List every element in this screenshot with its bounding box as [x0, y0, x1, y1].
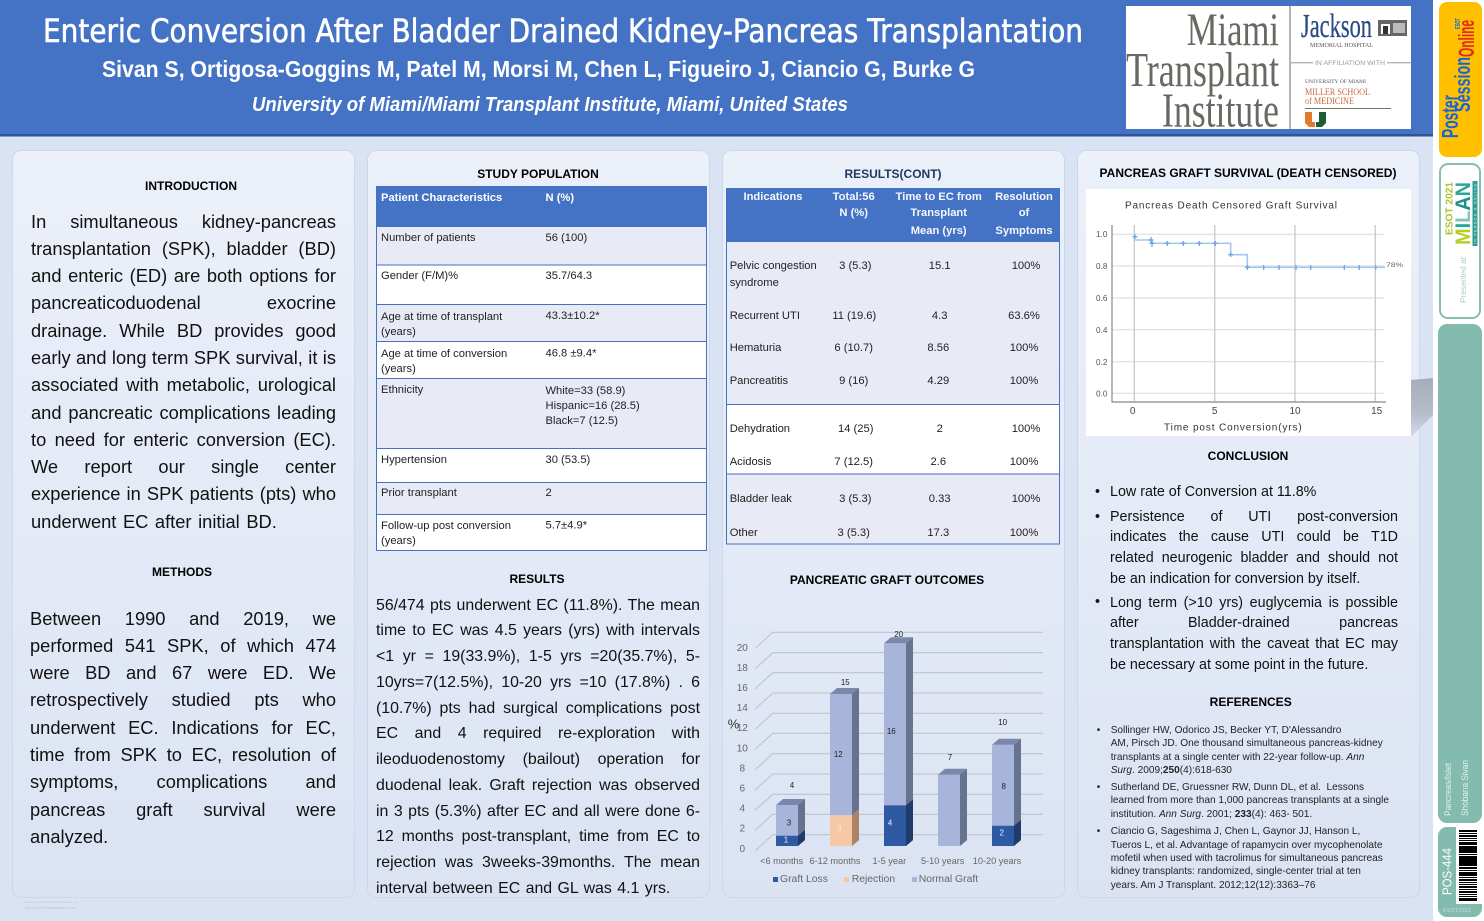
sidebar: ESOT 2021 Milan badge: ESOT 2021	[1444, 182, 1456, 235]
table: patient characteristics: Prior transplant	[381, 487, 458, 499]
chart: Kaplan-Meier graft survival curve: 1.0	[1096, 230, 1108, 239]
sidebar: topic and presenter strip: Pancreas/Islet	[1443, 763, 1454, 816]
sidebar: Poster Session Online badge: Session	[1450, 57, 1475, 112]
table: indications for conversion: Mean (yrs)	[911, 225, 967, 237]
table: patient characteristics: Follow-up post conversion	[381, 520, 511, 532]
logo: Miami Transplant Institute and affiliates: Jackson	[1301, 8, 1372, 45]
table: indications for conversion: 100%	[1010, 375, 1038, 387]
legend: Graft Loss	[780, 874, 828, 885]
table: indications for conversion: Total:56	[833, 191, 875, 203]
sidebar: Poster Session Online badge	[1439, 2, 1482, 157]
text block: conclusion bullets: transplantation with the caveat that EC may	[1110, 636, 1398, 652]
heading: results: RESULTS	[509, 572, 565, 586]
table: indications for conversion: Symptoms	[995, 225, 1053, 237]
y axis labels: 20	[737, 643, 748, 654]
logo: Miami Transplant Institute and affiliates: MILLER SCHOOL	[1305, 88, 1370, 98]
bar: 6-12 months	[826, 688, 860, 846]
table: indications for conversion: 0.33	[929, 493, 951, 505]
text block: results: duodenal leak. Graft rejection was observed	[376, 777, 700, 794]
logo: Miami Transplant Institute and affiliates: MEMORIAL HOSPITAL	[1310, 42, 1373, 49]
bar: 1-5 year	[880, 637, 914, 846]
text block: conclusion bullets: be an indication for conversion by itself.	[1110, 571, 1360, 587]
logo: Miami Transplant Institute and affiliates	[1126, 6, 1411, 129]
table: indications for conversion: 4.3	[932, 310, 947, 322]
bar value labels: 15	[841, 678, 850, 687]
table: patient characteristics: Age at time of conversion	[381, 348, 507, 360]
text block: results: 10yrs=7(12.5%), 10-20 yrs =10 (17.8%) . 6	[376, 674, 700, 691]
y axis labels: 10	[737, 743, 748, 754]
text block: conclusion bullets	[1095, 484, 1398, 673]
text block: methods: analyzed.	[30, 826, 108, 847]
text block: methods: were BD and 67 were ED. We	[30, 662, 336, 683]
chart: Kaplan-Meier graft survival curve: 5	[1212, 406, 1218, 417]
table: indications for conversion: 11 (19.6)	[832, 310, 877, 322]
text block: conclusion bullets: Low rate of Conversion at 11.8%	[1110, 484, 1316, 500]
table: indications for conversion: Indications	[743, 191, 803, 203]
chart: Kaplan-Meier graft survival curve	[1086, 189, 1411, 436]
bar value labels: 1	[784, 836, 789, 845]
y axis labels: 0	[740, 844, 746, 855]
y axis labels: 8	[740, 763, 746, 774]
panel: survival, conclusion and references: •	[1097, 725, 1100, 736]
table: indications for conversion: syndrome	[730, 277, 779, 289]
sidebar: topic and presenter strip: Shobana Sivan	[1460, 760, 1471, 816]
y axis labels: %	[728, 716, 740, 732]
text block: conclusion bullets: indicates the cause UTI could be T1D	[1110, 529, 1398, 545]
text block: introduction: experience in SPK patients (pts) who	[31, 483, 336, 504]
bar: 5-10 years	[934, 769, 968, 846]
bar value labels: 16	[887, 727, 896, 736]
table: indications for conversion: Time to EC from	[896, 191, 982, 203]
text block: results	[376, 597, 700, 897]
table: indications for conversion: 9 (16)	[839, 375, 869, 387]
chart: Kaplan-Meier graft survival curve: 0	[1130, 406, 1136, 417]
table: patient characteristics: 30 (53.5)	[546, 454, 591, 466]
text block: introduction: early and long term SPK survival, it is	[31, 347, 336, 368]
sidebar: poster number and barcode: POS-444	[1440, 848, 1454, 895]
text block: introduction: and pancreatic complications leading	[31, 402, 336, 423]
heading: references: REFERENCES	[1210, 695, 1292, 709]
y axis labels: 2	[740, 824, 746, 835]
chart: stacked 3D bar chart of graft outcomes	[728, 630, 1043, 885]
y axis labels: 4	[740, 804, 746, 815]
table: indications for conversion: Transplant	[910, 207, 967, 219]
table: indications for conversion: Recurrent UTI	[730, 310, 800, 322]
text block: methods: symptoms, complications and	[30, 771, 336, 792]
text block: conclusion bullets: after Bladder-drained pancreas	[1110, 615, 1398, 631]
panel: introduction and methods	[12, 150, 355, 898]
table: patient characteristics: 46.8 ±9.4*	[546, 348, 597, 360]
table: indications for conversion: 14 (25)	[838, 423, 874, 435]
table: patient characteristics: Gender (F/M)%	[381, 270, 458, 282]
panel: study population and results	[367, 150, 710, 898]
table: patient characteristics: 43.3±10.2*	[546, 310, 600, 322]
bar value labels: 4	[790, 781, 795, 790]
panel: survival, conclusion and references: •	[1095, 484, 1100, 500]
legend: Rejection	[852, 874, 895, 885]
bar value labels: 2	[999, 828, 1004, 837]
sidebar: Poster Session Online badge: ESOT	[1455, 18, 1462, 29]
table: patient characteristics: Black=7 (12.5)	[546, 415, 618, 427]
table: indications for conversion: 2.6	[931, 456, 946, 468]
table: indications for conversion: Hematuria	[730, 342, 782, 354]
text block: references: Sollinger HW, Odorico JS, Becker YT, D'Alessandro	[1111, 725, 1341, 736]
text block: references: Surg. 2009;250(4):618-630	[1111, 765, 1232, 776]
sidebar: poster number and barcode: ESOT2021	[1443, 908, 1471, 914]
table: indications for conversion: 63.6%	[1008, 310, 1040, 322]
table: patient characteristics: N (%)	[546, 192, 574, 204]
text block: references: mofetil when used with tacrolimus for simultaneous pancreas	[1111, 853, 1383, 864]
table: indications for conversion: 7 (12.5)	[834, 456, 873, 468]
sidebar: poster number and barcode	[1438, 827, 1482, 917]
bar value labels	[784, 630, 1008, 845]
chart: Kaplan-Meier graft survival curve: 0.6	[1096, 294, 1108, 303]
text block: conclusion bullets: Persistence of UTI post-conversion	[1110, 509, 1398, 525]
table: indications for conversion: Pelvic congestion	[730, 260, 817, 272]
barcode	[1459, 830, 1477, 901]
table: indications for conversion: of	[1019, 207, 1030, 219]
chart: Kaplan-Meier graft survival curve: 0.4	[1096, 326, 1108, 335]
table: indications for conversion: Acidosis	[730, 456, 772, 468]
text block: references: Sutherland DE, Gruessner RW, Dunn DL, et al. Lessons	[1111, 782, 1364, 793]
text block: methods: pancreas graft survival were	[30, 799, 336, 820]
header banner	[0, 0, 1433, 136]
table: indications for conversion: 3 (5.3)	[839, 493, 872, 505]
x axis labels: 10-20 years	[973, 856, 1022, 866]
footer credit	[25, 902, 78, 910]
sidebar: ESOT 2021 Milan badge	[1439, 163, 1481, 319]
table: indications for conversion: 100%	[1012, 423, 1040, 435]
text block: methods	[30, 608, 336, 847]
bar value labels: 3	[787, 818, 792, 827]
text block: introduction: and enteric (ED) are both options for	[31, 265, 336, 286]
table: indications for conversion: Bladder leak	[730, 493, 792, 505]
x axis labels: 1-5 year	[872, 856, 906, 866]
text block: introduction: to need for enteric conversion (EC).	[31, 429, 336, 450]
text block: conclusion bullets: Long term (>10 yrs) euglycemia is possible	[1110, 595, 1398, 611]
text block: introduction: In simultaneous kidney-pancreas	[31, 210, 336, 232]
panel: survival, conclusion and references: •	[1097, 782, 1100, 793]
text block: methods: time from SPK to EC, resolution of	[30, 744, 336, 765]
sidebar: topic and presenter strip	[1438, 324, 1482, 823]
table: indications for conversion: N (%)	[839, 207, 868, 219]
x axis labels: 6-12 months	[809, 856, 861, 866]
text block: methods: retrospectively studied pts who	[30, 689, 336, 710]
panel: survival, conclusion and references	[1077, 150, 1420, 898]
footer credit: RESEARCH POSTER PRESENTATION DESIGN © 2015	[25, 902, 78, 904]
table: patient characteristics: Patient Characteristics	[381, 192, 502, 204]
y axis labels: 16	[737, 683, 748, 694]
logo: Miami Transplant Institute and affiliates: UNIVERSITY OF MIAMI	[1305, 79, 1366, 85]
text block: methods: Between 1990 and 2019, we	[30, 608, 336, 628]
y axis labels	[728, 643, 748, 855]
table: patient characteristics: Age at time of transplant	[381, 311, 503, 323]
text block: references: kidney transplants: randomized, single-center trial at ten	[1111, 866, 1361, 877]
heading: results continued: RESULTS(CONT)	[844, 167, 942, 181]
text block: results: in 3 pts (5.3%) after EC and all were done 6-	[376, 803, 700, 820]
affiliation: University of Miami/Miami Transplant Institute, Miami, United States	[252, 93, 848, 116]
y axis labels: 12	[737, 723, 748, 734]
text block: methods: underwent EC. Indications for EC,	[30, 717, 336, 738]
table: indications for conversion: 100%	[1012, 260, 1040, 272]
logo: Miami Transplant Institute and affiliates: of MEDICINE	[1305, 96, 1354, 107]
bar value labels: 12	[834, 750, 843, 759]
chart: Kaplan-Meier graft survival curve: 10	[1289, 406, 1301, 417]
authors: Sivan S, Ortigosa-Goggins M, Patel M, Morsi M, Chen L, Figueiro J, Ciancio G, Burke G	[102, 56, 975, 82]
heading: methods: METHODS	[152, 565, 212, 579]
text block: references: Ciancio G, Sageshima J, Chen L, Gaynor JJ, Hanson L,	[1111, 826, 1360, 837]
table: indications for conversion: 15.1	[929, 260, 951, 272]
text block: results: <1 yr = 19(33.9%), 1-5 yrs =20(35.7%), 5-	[376, 648, 700, 665]
table: indications for conversion: Pancreatitis	[730, 375, 789, 387]
text block: introduction: We report our single center	[31, 456, 336, 477]
table: patient characteristics: (years)	[381, 535, 416, 547]
bar: 10-20 years	[988, 739, 1022, 846]
bar value labels: 20	[894, 630, 904, 639]
table: patient characteristics: Ethnicity	[381, 384, 424, 396]
x axis labels	[760, 856, 1022, 866]
table: indications for conversion: Other	[730, 527, 758, 539]
bar value labels: 8	[1001, 782, 1006, 791]
logo: Miami Transplant Institute and affiliates: Transplant	[1126, 42, 1279, 97]
text block: introduction	[31, 210, 336, 532]
panel: survival, conclusion and references: •	[1095, 508, 1100, 524]
text block: references: AM, Pirsch JD. One thousand simultaneous pancreas-kidney	[1111, 738, 1383, 749]
table: indications for conversion: 100%	[1010, 342, 1038, 354]
text block: references: learned from more than 1,000 pancreas transplants at a single	[1111, 795, 1389, 806]
x axis labels: 5-10 years	[921, 856, 965, 866]
text block: introduction: underwent EC after initial BD.	[31, 511, 277, 532]
table: indications for conversion: 100%	[1010, 456, 1038, 468]
heading: pancreas graft survival: PANCREAS GRAFT SURVIVAL (DEATH CENSORED)	[1100, 166, 1396, 180]
table: indications for conversion: 4.29	[927, 375, 949, 387]
chart: Kaplan-Meier graft survival curve: 78%	[1386, 263, 1404, 269]
table: indications for conversion: 8.56	[927, 342, 949, 354]
y axis labels: 6	[740, 784, 746, 794]
text block: introduction: drainage. While BD provides good	[31, 320, 336, 341]
text block: methods: performed 541 SPK, of which 474	[30, 635, 336, 656]
table: indications for conversion: 100%	[1010, 527, 1038, 539]
heading: conclusion: CONCLUSION	[1208, 449, 1288, 463]
text block: conclusion bullets: be necessary at some point in the future.	[1110, 657, 1368, 673]
chart: Kaplan-Meier graft survival curve: Pancreas Death Censored Graft Survival	[1125, 200, 1337, 211]
table: indications for conversion: 100%	[1012, 493, 1040, 505]
title: Enteric Conversion After Bladder Drained Kidney-Pancreas Transplantation	[43, 12, 1083, 50]
table: patient characteristics: Hypertension	[381, 454, 447, 466]
text block: results: 56/474 pts underwent EC (11.8%). The mean	[376, 597, 700, 614]
table: indications for conversion	[726, 188, 1060, 544]
sidebar: ESOT 2021 Milan badge: IN PERSON & ONLINE	[1473, 184, 1478, 244]
table: patient characteristics: Number of patients	[381, 232, 476, 244]
legend	[773, 874, 978, 885]
text block: introduction: transplantation (SPK), bladder (BD)	[31, 238, 336, 259]
chart: Kaplan-Meier graft survival curve: 0.2	[1096, 358, 1108, 367]
heading: introduction: INTRODUCTION	[145, 179, 237, 193]
sidebar: ESOT 2021 Milan badge: Presented at:	[1458, 255, 1468, 303]
text block: results: time to EC was 4.5 years (yrs) with intervals	[376, 622, 700, 639]
panel: results continued and graft outcomes	[722, 150, 1065, 898]
bar value labels: 4	[888, 818, 893, 827]
panel: survival, conclusion and references: •	[1097, 826, 1100, 837]
text block: conclusion bullets: related neurogenic bladder and should not	[1110, 550, 1398, 566]
text block: introduction: associated with metabolic, urological	[31, 374, 336, 395]
text block: results: interval between EC and GL was 4.1 yrs.	[376, 880, 670, 897]
table: patient characteristics	[376, 186, 707, 551]
text block: references: years. Am J Transplant. 2012;12(12):3363–76	[1111, 880, 1316, 891]
footer credit: www.PosterPresentations.com	[25, 906, 76, 910]
logo shadow wedge	[1411, 378, 1433, 437]
table: patient characteristics: 2	[546, 487, 552, 499]
text block: results: (10.7%) pts had surgical complications post	[376, 700, 700, 717]
text block: references: transplants at a single center with 22-year follow-up. Ann	[1111, 752, 1364, 763]
chart: Kaplan-Meier graft survival curve: 0.0	[1096, 390, 1108, 398]
table: patient characteristics: White=33 (58.9)	[546, 385, 626, 397]
text block: results: 12 months post-transplant, time from EC to	[376, 828, 700, 845]
y axis labels: 14	[737, 703, 748, 714]
heading: study population: STUDY POPULATION	[477, 167, 599, 181]
text block: results: ileoduodenostomy (bailout) operation for	[376, 751, 700, 768]
table: indications for conversion: 3 (5.3)	[839, 260, 872, 272]
sidebar: ESOT 2021 Milan badge: MILAN	[1452, 182, 1475, 245]
chart: Kaplan-Meier graft survival curve: Time post Conversion(yrs)	[1164, 423, 1302, 434]
table: patient characteristics: 35.7/64.3	[546, 270, 592, 282]
table: patient characteristics: 5.7±4.9*	[546, 520, 588, 532]
table: patient characteristics: Hispanic=16 (28.5)	[546, 400, 640, 412]
bar value labels: 3	[837, 823, 842, 832]
text block: introduction: pancreaticoduodenal exocrine	[31, 292, 336, 313]
table: patient characteristics: (years)	[381, 326, 416, 338]
bar value labels: 7	[948, 753, 953, 762]
text block: references: institution. Ann Surg. 2001; 233(4): 463- 501.	[1111, 809, 1312, 820]
text block: results: EC and 4 required re-exploration with	[376, 725, 700, 742]
text block: results: rejection was 3weeks-39months. The mean	[376, 854, 700, 871]
table: patient characteristics: 56 (100)	[546, 232, 587, 244]
table: indications for conversion: Resolution	[995, 191, 1053, 203]
table: indications for conversion: 2	[937, 423, 943, 435]
heading: pancreatic graft outcomes: PANCREATIC GRAFT OUTCOMES	[790, 573, 984, 587]
panel: survival, conclusion and references: •	[1095, 594, 1100, 610]
text block: references	[1097, 725, 1389, 891]
chart: Kaplan-Meier graft survival curve: 0.8	[1096, 262, 1108, 271]
table: indications for conversion: 17.3	[927, 527, 949, 539]
x axis labels: <6 months	[760, 856, 804, 866]
table: indications for conversion: Dehydration	[730, 423, 790, 435]
logo: Miami Transplant Institute and affiliates: IN AFFILIATION WITH	[1315, 60, 1385, 67]
y axis labels: 18	[737, 663, 748, 674]
bar: under 6 months	[772, 799, 806, 846]
legend: Normal Graft	[919, 874, 978, 885]
text block: references: Tueros L, et al. Advantage of rapamycin over mycophenolate	[1111, 840, 1382, 851]
bar value labels: 10	[998, 718, 1008, 727]
table: indications for conversion: 6 (10.7)	[834, 342, 873, 354]
table: patient characteristics: (years)	[381, 363, 416, 375]
table: indications for conversion: 3 (5.3)	[838, 527, 870, 539]
chart: Kaplan-Meier graft survival curve: 15	[1371, 406, 1383, 417]
